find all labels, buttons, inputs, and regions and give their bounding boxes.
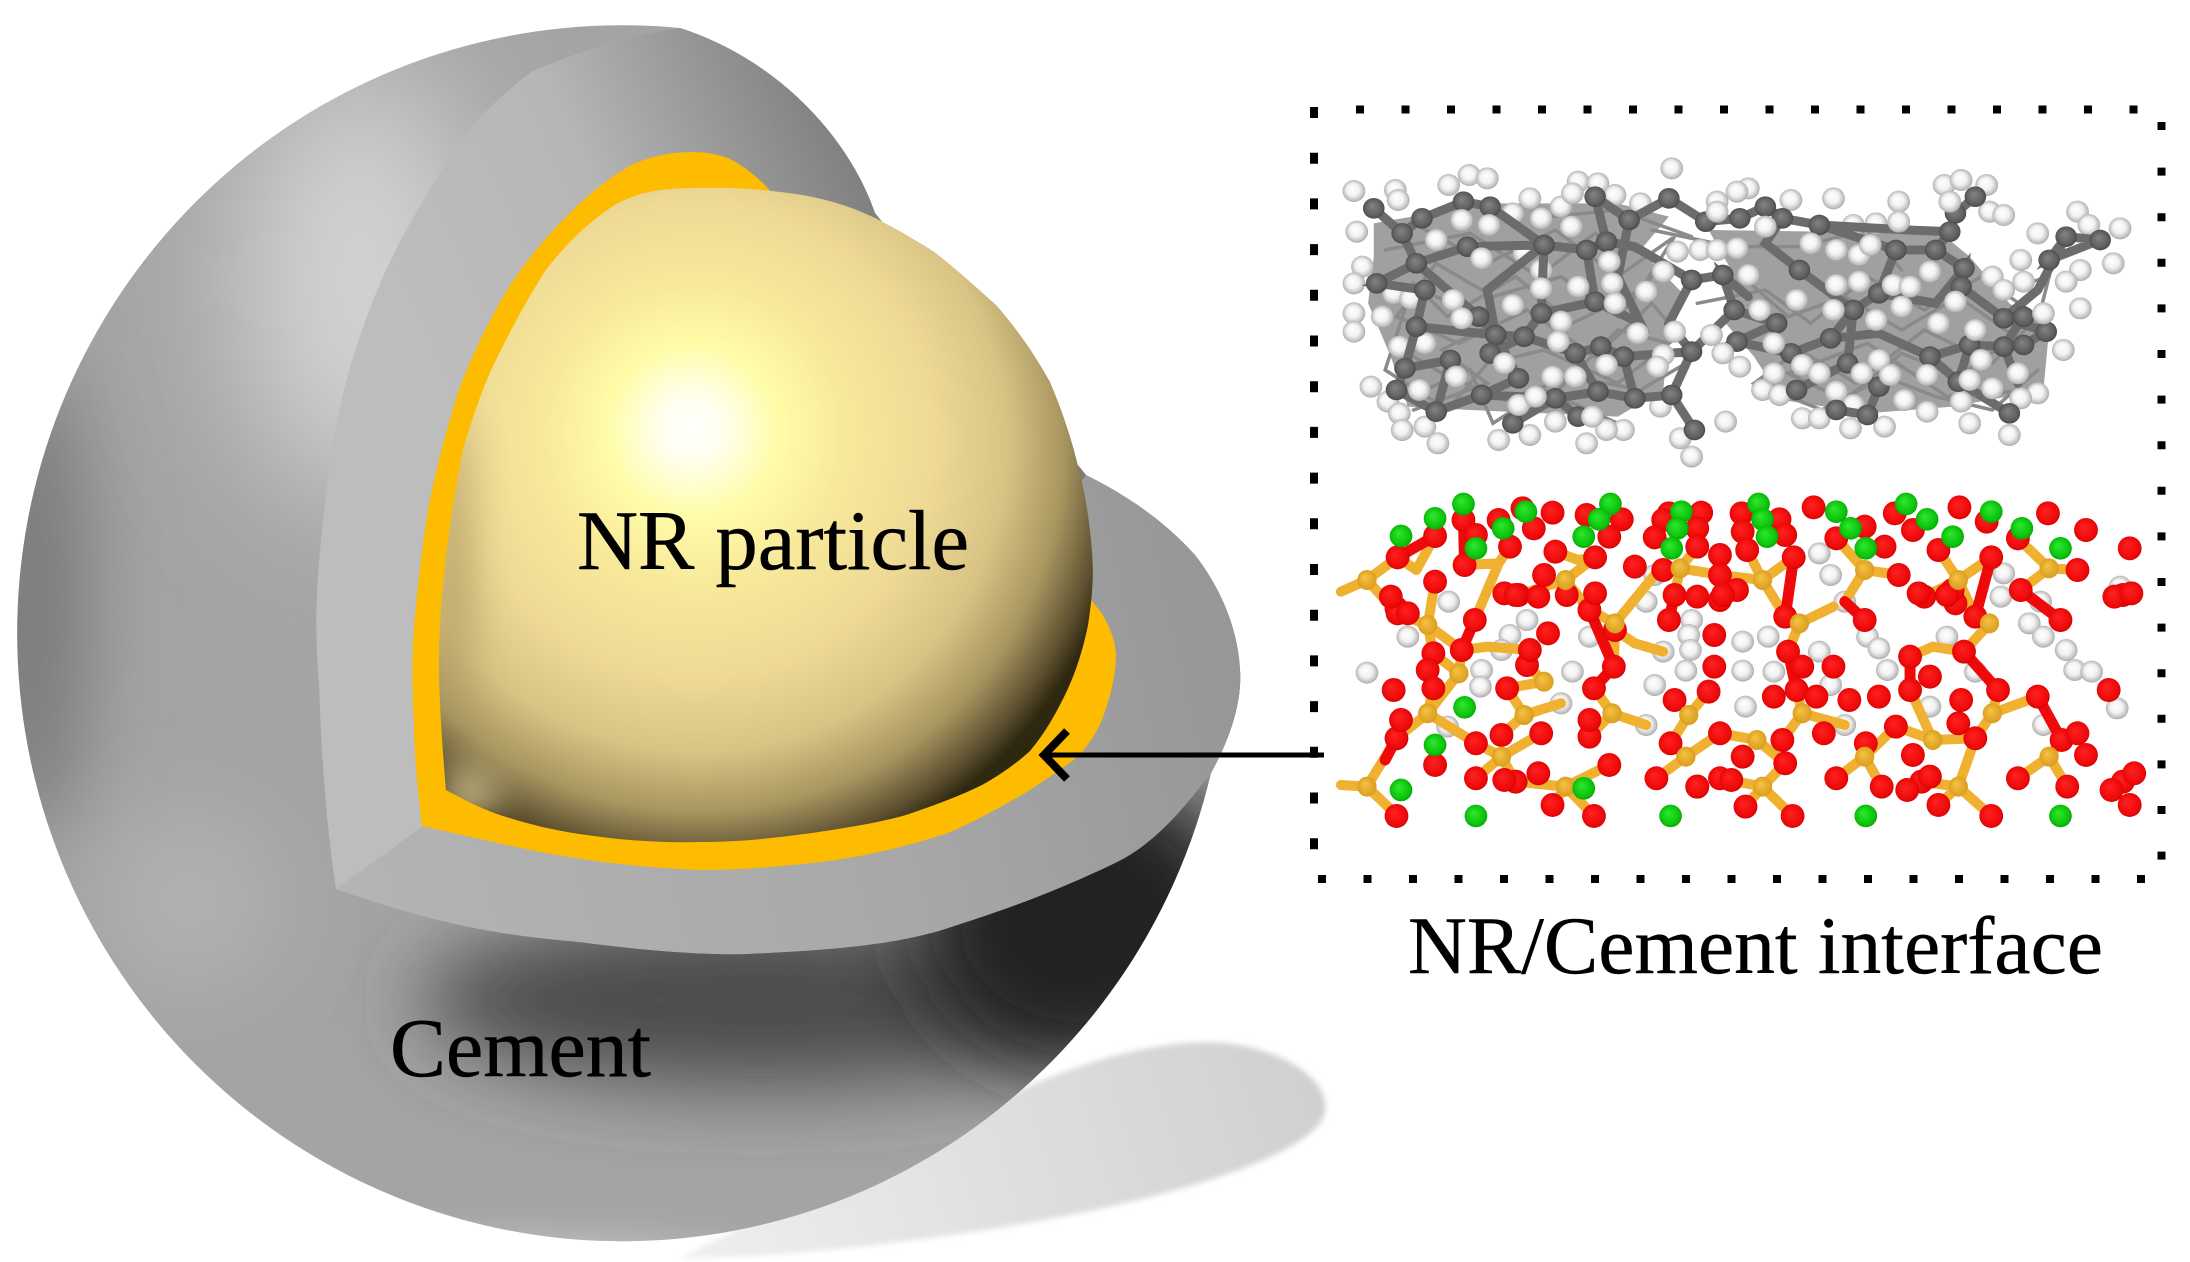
arrow pointing to interface layer <box>1044 731 1324 779</box>
orange interface layer <box>412 152 1116 870</box>
label: Cement: Cement <box>390 1002 651 1095</box>
drop shadow under sphere <box>680 1042 1325 1258</box>
cut wall of cement <box>316 28 1240 954</box>
cut plane of cement <box>336 475 1240 954</box>
cement sphere with cut-away <box>0 0 1300 1262</box>
label: NR particle: NR particle <box>577 494 969 588</box>
cement substrate molecule <box>1341 493 2146 828</box>
dotted frame around interface detail <box>1314 107 2162 879</box>
label: NR/Cement interface: NR/Cement interface <box>1408 900 2103 991</box>
NR polymer molecule <box>1343 157 2131 468</box>
outer cement surface <box>0 0 1300 1262</box>
NR particle core <box>434 188 1093 842</box>
